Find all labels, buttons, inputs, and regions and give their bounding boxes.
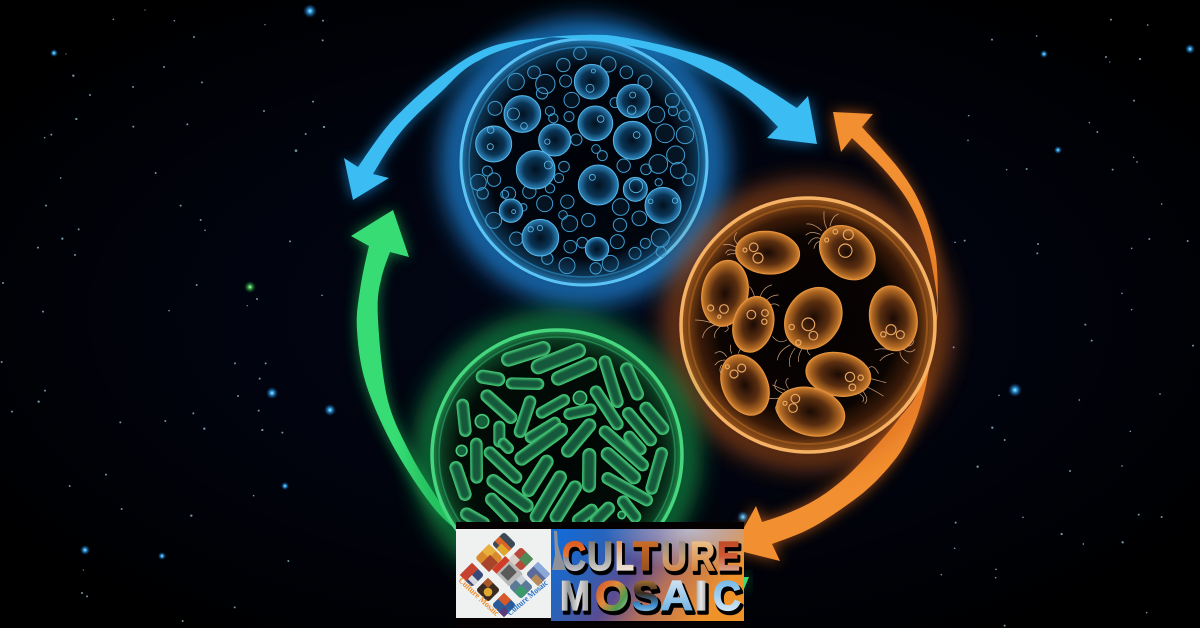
wordmark: MOSAIC: S [632, 572, 659, 619]
wordmark shadow: M [562, 576, 592, 622]
wordmark: CULTURE: E [717, 533, 740, 579]
wordmark: CULTURE: L [615, 533, 634, 579]
wordmark: CULTURE: R [690, 533, 715, 579]
wordmark shadow: I [696, 576, 710, 622]
wordmark: MOSAIC: M [560, 572, 590, 619]
panel: green bacilli culture [428, 326, 686, 584]
icon: statue of liberty [552, 531, 566, 570]
arrow: green, from bacteria up to blue [351, 210, 453, 527]
wordmark: MOSAIC [560, 572, 741, 619]
wordmark: MOSAIC: A [660, 572, 693, 619]
panel: orange protozoa culture [676, 193, 940, 457]
arrow: blue, over the top to the right [547, 35, 817, 144]
wordmark shadow: O [597, 576, 631, 622]
wordmark shadow: C [715, 576, 743, 622]
arrow tip: green remnant beside the logo [740, 575, 750, 592]
logo: diamond mosaic panel [456, 529, 551, 618]
wordmark shadow: U [663, 536, 689, 582]
wordmark shadow: T [635, 536, 660, 582]
wordmark shadow: L [617, 536, 636, 582]
wordmark: CULTURE [562, 533, 740, 579]
blue microbes [470, 47, 695, 274]
panel: blue cocci culture [456, 34, 712, 290]
wordmark: CULTURE: U [587, 533, 613, 579]
wordmark shadow [562, 536, 743, 622]
wordmark: MOSAIC: C [713, 572, 741, 619]
wordmark: MOSAIC: I [694, 572, 708, 619]
arrow: blue, over the top to the left [344, 37, 553, 200]
wordmark shadow: A [662, 576, 695, 622]
wordmark: CULTURE: T [633, 533, 658, 579]
orange microbes [695, 212, 922, 443]
wordmark shadow: S [634, 576, 661, 622]
logo: small blue caption: Culture Mosaic [505, 578, 550, 618]
green rods [456, 348, 663, 523]
logo: wordmark panel [551, 529, 744, 622]
wordmark: MOSAIC: O [595, 572, 629, 619]
arrow: orange, down to lower left [732, 300, 938, 561]
wordmark shadow: U [589, 536, 615, 582]
wordmark shadow: R [692, 536, 717, 582]
logo: Culture Mosaic [456, 522, 744, 628]
wordmark: CULTURE: U [661, 533, 687, 579]
wordmark shadow: E [719, 536, 742, 582]
wordmark: CULTURE: C [562, 533, 586, 579]
arrow: orange, up to upper right [833, 112, 938, 310]
logo: small orange caption: Culture Mosaic [457, 575, 501, 618]
wordmark shadow: C [564, 536, 588, 582]
